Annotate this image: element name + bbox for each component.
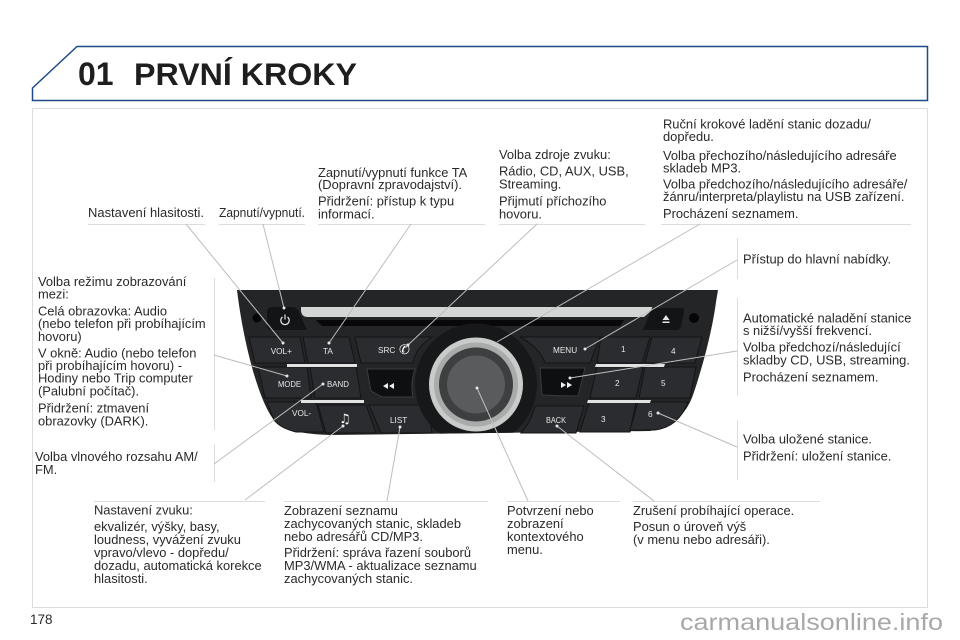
button labels: 1 [621,345,626,354]
button labels: 2 [615,379,620,388]
label: source: hovoru. [499,206,542,222]
label: TA: Zapnutí/vypnutí funkce TA [318,165,468,180]
CD slot bar [301,307,652,317]
label: back: Posun o úroveň výš [633,519,746,534]
radio body [237,290,718,435]
button labels: BACK [546,416,566,425]
label: power: Zapnutí/vypnutí. [219,205,305,220]
label: display mode: V okně: Audio (nebo telefon [38,346,196,360]
label: display mode: obrazovky (DARK). [38,414,148,428]
leader lines [186,224,737,501]
label: presets [743,432,891,464]
car radio control panel [237,290,718,446]
control knob [415,324,537,446]
label: sound settings: dozadu, automatická korekce [94,558,262,573]
label: sound settings: ekvalizér, výšky, basy, [94,519,220,534]
label: sound settings: vpravo/vlevo - dopředu/ [94,545,229,560]
button labels: BAND [327,380,349,389]
label: presets: Přidržení: uložení stanice. [743,448,891,464]
button labels: 4 [671,347,676,356]
button labels: VOL+ [271,347,292,356]
CD slot [316,320,624,326]
label: manual tuning: Procházení seznamem. [663,206,798,221]
label: manual tuning: dopředu. [663,129,714,144]
label: back: (v menu nebo adresáři). [633,532,770,547]
label: confirm: menu. [507,542,543,557]
label: band: Volba vlnového rozsahu AM/ [35,449,198,464]
power button [267,307,307,330]
label: display mode: Volba režimu zobrazování [38,274,187,289]
label: display mode: hovoru) [38,329,82,344]
watermark: carmanualsonline.info [680,609,943,635]
leader dots [282,306,660,428]
label: automatic tuning: Volba předchozí/následující [743,340,901,354]
chrome strips [287,364,665,403]
title: PRVNÍ KROKY [134,56,357,92]
label: confirm [507,503,594,557]
label: display mode: Hodiny nebo Trip computer [38,370,193,386]
label: presets: Volba uložené stanice. [743,432,872,446]
label: list [284,503,477,586]
button labels: MODE [278,380,302,389]
label: main menu: Přístup do hlavní nabídky. [743,252,891,266]
label: confirm: Potvrzení nebo [507,503,594,518]
left buttons [249,337,432,433]
label: source: Volba zdroje zvuku: [499,147,611,162]
right buttons [520,337,702,433]
label: automatic tuning: Automatické naladění stanice [743,310,911,326]
label: sound settings: loudness, vyvážení zvuku [94,532,241,547]
label: volume: Nastavení hlasitosti. [88,205,204,220]
label: source: Rádio, CD, AUX, USB, [499,164,629,178]
header banner [32,46,928,100]
eject button [643,308,684,330]
label: list: Zobrazení seznamu [284,503,398,518]
page number: 178 [30,612,53,627]
label: manual tuning: žánru/interpreta/playlistu na USB zařízení. [663,189,904,204]
label: display mode: (nebo telefon při probíhajícím [38,316,206,331]
label: manual tuning: Volba předchozího/následujícího adresáře/ [663,176,908,192]
content panel [32,108,928,608]
separators [88,224,911,502]
button labels: 3 [601,415,606,424]
label: list: nebo adresářů CD/MP3. [284,529,423,544]
button labels: ✆ [399,343,410,358]
label: display mode [38,274,206,428]
label: display mode: Celá obrazovka: Audio [38,304,167,318]
label: band: FM. [35,462,57,477]
label: automatic tuning [743,310,911,384]
label: back: Zrušení probíhající operace. [633,503,794,518]
label: sound settings: hlasitosti. [94,571,148,586]
label: source: Přijmutí příchozího [499,194,606,208]
label: manual tuning: skladeb MP3. [663,160,741,176]
label: back [633,503,794,547]
label: list: zachycovaných stanic, skladeb [284,516,461,531]
next button [540,368,585,396]
label: manual tuning [663,116,908,221]
label: TA: informací. [318,206,375,222]
button labels: 6 [648,410,653,419]
label: confirm: kontextového [507,529,584,544]
previous button [367,369,415,397]
label: sound settings [94,502,262,586]
button labels: 5 [661,379,666,388]
next icon [561,382,572,388]
screw holes [252,313,699,323]
button labels: TA [323,347,333,356]
button labels: MENU [553,346,577,355]
label: source: Streaming. [499,176,561,192]
label: TA: (Dopravní zpravodajství). [318,177,462,192]
button labels: LIST [390,416,407,425]
previous icon [383,383,394,389]
label: display mode: Přidržení: ztmavení [38,400,149,416]
label: band [35,449,198,477]
label: list: Přidržení: správa řazení souborů [284,545,471,560]
label: automatic tuning: Procházení seznamem. [743,370,878,384]
label: TA [318,165,468,222]
label: list: MP3/WMA - aktualizace seznamu [284,558,477,573]
label: confirm: zobrazení [507,516,564,531]
label: sound settings: Nastavení zvuku: [94,502,193,518]
button labels [271,343,676,427]
label: TA: Přidržení: přístup k typu [318,194,454,208]
chapter number: 01 [78,56,114,92]
label: manual tuning: Ruční krokové ladění stanic dozadu/ [663,116,871,132]
label: display mode: při probíhajícím hovoru) - [38,358,182,373]
label: display mode: mezi: [38,286,69,302]
label: display mode: (Palubní počítač). [38,384,139,398]
label: automatic tuning: skladby CD, USB, streaming. [743,352,910,368]
button labels: ♫ [339,412,351,427]
label: automatic tuning: s nižší/vyšší frekvencí. [743,323,872,338]
label: list: zachycovaných stanic. [284,571,413,586]
button labels: VOL- [292,409,311,418]
label: manual tuning: Volba přechozího/následujícího adresáře [663,148,897,163]
button labels: SRC [378,346,395,355]
label: source [499,147,629,222]
